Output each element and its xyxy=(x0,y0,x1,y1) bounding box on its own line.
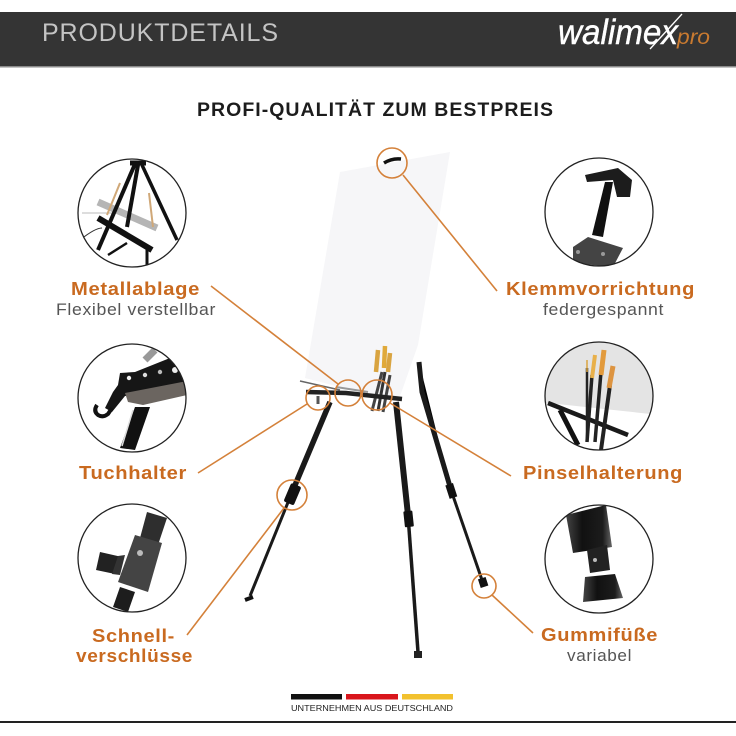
callout: Gummifüße xyxy=(472,574,533,633)
panel: Klemmvorrichtung xyxy=(506,158,695,319)
logo: walimex pro: walimex xyxy=(558,13,679,52)
sublabel: Flexibel verstellbar xyxy=(56,300,216,319)
tray xyxy=(300,381,402,404)
panel: Tuchhalter xyxy=(78,344,190,483)
callout: Tuchhalter xyxy=(198,386,330,473)
icon: rubber foot xyxy=(566,505,623,602)
label: Tuchhalter xyxy=(79,462,187,483)
centre leg xyxy=(396,402,422,658)
label: Schnell- xyxy=(92,625,175,646)
sublabel: federgespannt xyxy=(543,300,664,319)
icon: brushes in holder xyxy=(546,342,652,450)
right leg xyxy=(419,362,488,588)
icon: quick release clamp xyxy=(96,512,167,612)
left leg xyxy=(245,402,330,600)
label: Klemmvorrichtung xyxy=(506,278,695,299)
header title: PRODUKTDETAILS xyxy=(42,19,278,47)
panel: Pinselhalterung xyxy=(523,340,683,483)
icon: cloth holder hook xyxy=(95,350,190,450)
logo: walimex pro: pro xyxy=(676,26,710,49)
label: verschlüsse xyxy=(76,645,193,666)
badge: Unternehmen aus Deutschland xyxy=(291,694,453,713)
central easel photo xyxy=(245,152,488,658)
callout: Klemmvorrichtung xyxy=(377,148,497,291)
icon: easel with metal tray xyxy=(80,163,177,267)
icon: spring clamp xyxy=(573,168,632,267)
canvas xyxy=(305,152,450,402)
top clamp xyxy=(384,159,401,163)
panel: Metallablage xyxy=(56,159,216,319)
label xyxy=(76,625,193,666)
main heading: PROFI-QUALITÄT ZUM BESTPREIS xyxy=(197,98,553,121)
bottom rule xyxy=(0,721,736,723)
label: Pinselhalterung xyxy=(523,462,683,483)
panel: Schnellverschlüsse xyxy=(76,504,193,666)
sublabel: variabel xyxy=(567,646,632,665)
label: Metallablage xyxy=(71,278,200,299)
header bar xyxy=(0,12,736,68)
label: Gummifüße xyxy=(541,624,658,645)
panel: Gummifüße xyxy=(541,505,658,665)
callout: Schnellverschlüsse xyxy=(187,480,307,635)
brushes xyxy=(372,346,390,412)
badge: Unternehmen aus Deutschland: UNTERNEHMEN AUS DEUTSCHLAND xyxy=(291,704,453,713)
callout lines and rings xyxy=(187,148,533,635)
callout: Metallablage xyxy=(211,286,361,406)
callout: Pinselhalterung xyxy=(362,380,511,476)
